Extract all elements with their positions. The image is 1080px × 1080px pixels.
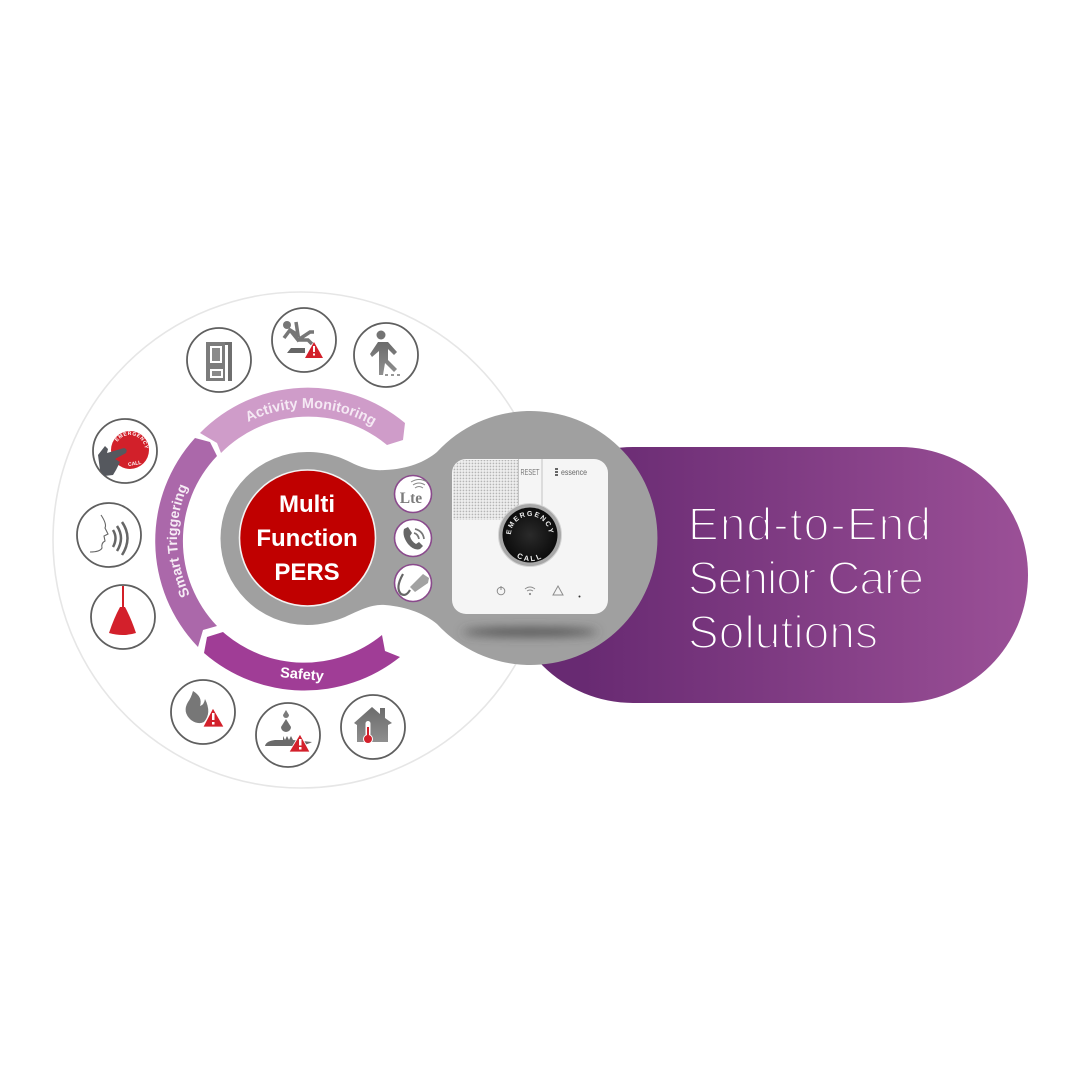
icon: emergency button press (92, 418, 158, 484)
arc: Safety (204, 632, 400, 691)
icon: walking person (354, 323, 418, 387)
icon: pull cord (91, 585, 155, 649)
icon: LTE: Lte (400, 490, 422, 507)
icon: voice activation (77, 503, 141, 567)
arc: Activity Monitoring (200, 388, 405, 453)
brand logo: essence (561, 468, 587, 477)
center badge: Multi Function PERS (240, 470, 376, 606)
arc: Safety: Safety (280, 665, 324, 685)
headline: End-to-End Senior Care Solutions (688, 498, 931, 658)
speaker grill (453, 460, 518, 520)
emergency button: CALL (518, 554, 542, 562)
icon: home temperature (341, 695, 405, 759)
emergency button: EMERGENCY (506, 511, 554, 534)
reset strip (518, 459, 542, 510)
icon: ethernet cable (394, 564, 432, 602)
purple pill panel (505, 447, 1028, 703)
icon: water leak (256, 703, 320, 767)
center badge: Multi Function PERS: Function (256, 525, 358, 552)
device body (452, 459, 608, 614)
center badge: Multi Function PERS: Multi (279, 491, 335, 518)
icon: fall detection (272, 308, 336, 372)
emergency button (498, 503, 562, 567)
icon: emergency button press: CALL (128, 460, 142, 468)
device shadow (462, 628, 598, 636)
arc: Smart Triggering: Smart Triggering (166, 484, 190, 598)
device: emergency call unit (452, 459, 608, 642)
headline: End-to-End Senior Care Solutions: End-to-End (688, 498, 931, 550)
icon: door sensor (187, 328, 251, 392)
center badge: Multi Function PERS: PERS (274, 559, 340, 586)
icon: fire alarm (171, 680, 235, 744)
arc: Smart Triggering (155, 438, 217, 647)
icon: phone (394, 520, 432, 556)
large outline circle (53, 292, 549, 788)
reset strip: RESET (520, 468, 540, 477)
icon: LTE (394, 476, 432, 512)
grey dumbbell panel (220, 411, 657, 665)
headline: End-to-End Senior Care Solutions: Solutions (688, 606, 878, 658)
icon: emergency button press: EMERGENCY (114, 432, 148, 448)
arc: Activity Monitoring: Activity Monitoring (248, 398, 376, 427)
status LEDs (497, 586, 580, 597)
headline: End-to-End Senior Care Solutions: Senior Care (688, 552, 924, 604)
